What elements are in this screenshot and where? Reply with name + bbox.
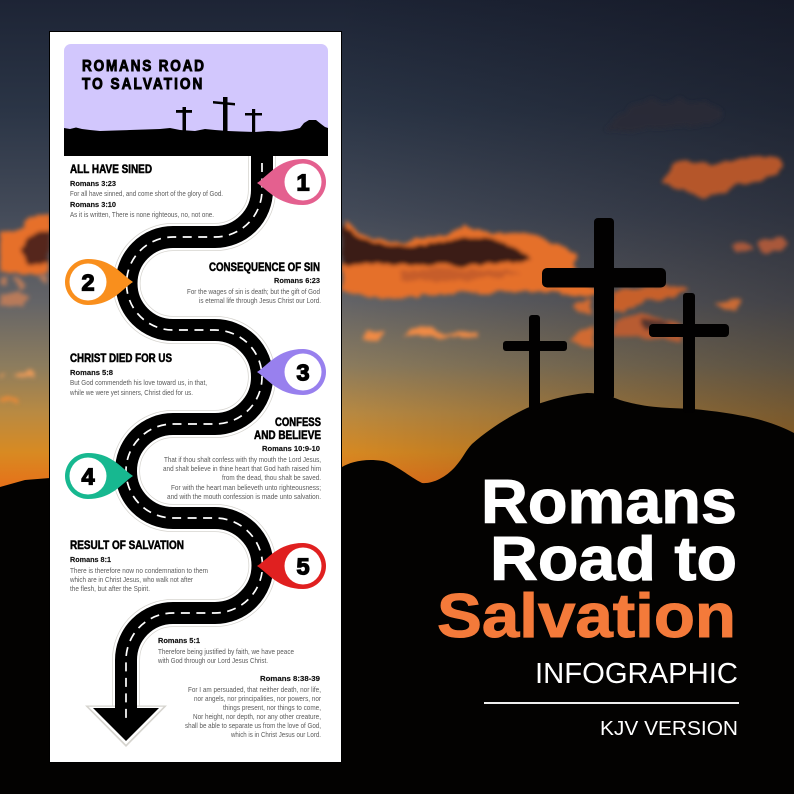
section 2: consequence of sin: CONSEQUENCE OF SIN — [209, 262, 320, 274]
three crosses on the hill — [503, 218, 729, 413]
banner title: TO SALVATION — [82, 76, 204, 93]
hill silhouette — [0, 393, 794, 794]
section 4: confess and believe: Romans 10:9-10 — [262, 444, 320, 453]
subtitle: infographic: INFOGRAPHIC — [535, 658, 738, 690]
divider line — [484, 702, 739, 704]
pin 4 — [65, 453, 133, 499]
section 4: confess and believe: AND BELIEVE — [254, 430, 321, 442]
pin 4: 4 — [81, 464, 95, 490]
pin 1: 1 — [296, 170, 310, 196]
main title — [437, 468, 737, 651]
section 3: christ died for us: while we were yet sinners, Christ died for us. — [69, 388, 193, 397]
section 3: christ died for us: But God commendeth his love toward us, in that, — [70, 378, 207, 387]
section 3: christ died for us: Romans 5:8 — [70, 368, 113, 377]
small crosses — [176, 97, 262, 132]
section 4: confess and believe: and shalt believe in thine heart that God hath raised him — [163, 464, 321, 473]
section 4: confess and believe — [163, 417, 321, 501]
section 1: all have sined: ALL HAVE SINED — [70, 164, 152, 176]
panel: infographic sheet — [49, 31, 342, 763]
pin 2 — [65, 259, 133, 305]
verse: Romans 8:38-39: Nor height, nor depth, nor any other creature, — [193, 712, 321, 721]
section 4: confess and believe: and with the mouth confession is made unto salvation. — [167, 492, 321, 501]
section 2: consequence of sin: Romans 6:23 — [274, 276, 320, 285]
subtitle: KJV version: KJV VERSION — [600, 717, 738, 740]
panel: header banner — [64, 44, 328, 156]
section 1: all have sined: As it is written, There is none righteous, no, not one. — [70, 210, 214, 219]
section 4: confess and believe: CONFESS — [275, 417, 321, 429]
verse: Romans 5:1: Romans 5:1 — [158, 636, 200, 645]
section 4: confess and believe: For with the heart man believeth unto righteousness; — [171, 483, 321, 492]
main title: Salvation — [437, 582, 736, 651]
pin 5 — [257, 543, 326, 589]
section 3: christ died for us — [69, 353, 207, 397]
ground silhouette — [64, 120, 328, 156]
pin 5: 5 — [296, 554, 310, 580]
section 1: all have sined — [70, 164, 223, 219]
section 1: all have sined: For all have sinned, and come short of the glory of God. — [70, 189, 223, 198]
section 2: consequence of sin — [187, 262, 321, 305]
clouds — [0, 100, 787, 402]
verse: Romans 5:1: with God through our Lord Jesus Christ. — [157, 656, 268, 665]
section 5: result of salvation — [69, 540, 208, 593]
section 1: all have sined: Romans 3:10 — [70, 200, 116, 209]
section 5: result of salvation: Romans 8:1 — [70, 555, 111, 564]
section 4: confess and believe: That if thou shalt confess with thy mouth the Lord Jesus, — [164, 455, 321, 464]
pin 2: 2 — [81, 270, 95, 296]
main title: Romans — [481, 468, 737, 537]
verse: Romans 8:38-39: things present, nor things to come, — [223, 703, 321, 712]
section 2: consequence of sin: For the wages of sin is death; but the gift of God — [187, 287, 320, 296]
verse: Romans 5:1: Therefore being justified by faith, we have peace — [158, 647, 294, 656]
verse: Romans 8:38-39: shall be able to separate us from the love of God, — [185, 721, 321, 730]
verse: Romans 8:38-39: Romans 8:38-39 — [260, 674, 320, 683]
section 5: result of salvation: which are in Christ Jesus, who walk not after — [69, 575, 193, 584]
banner title: ROMANS ROAD — [82, 58, 206, 75]
main title: Road to — [490, 525, 737, 594]
section 5: result of salvation: There is therefore now no condemnation to them — [70, 566, 208, 575]
pin 3: 3 — [296, 360, 310, 386]
verse: Romans 8:38-39: nor angels, nor principalities, nor powers, nor — [194, 694, 321, 703]
verse: Romans 8:38-39: which is in Christ Jesus our Lord. — [230, 730, 321, 739]
pin 3 — [257, 349, 326, 395]
verse: Romans 8:38-39: For I am persuaded, that neither death, nor life, — [188, 685, 321, 694]
section 3: christ died for us: CHRIST DIED FOR US — [70, 353, 172, 365]
verse: Romans 5:1 — [157, 636, 294, 665]
section 4: confess and believe: from the dead, thou shalt be saved. — [222, 473, 321, 482]
pin 1 — [257, 159, 326, 205]
section 5: result of salvation: RESULT OF SALVATION — [70, 540, 184, 552]
section 1: all have sined: Romans 3:23 — [70, 179, 116, 188]
banner title — [82, 58, 206, 93]
road — [85, 156, 263, 747]
section 2: consequence of sin: is eternal life through Jesus Christ our Lord. — [199, 296, 321, 305]
verse: Romans 8:38-39 — [185, 674, 321, 739]
section 5: result of salvation: the flesh, but after the Spirit. — [70, 584, 150, 593]
